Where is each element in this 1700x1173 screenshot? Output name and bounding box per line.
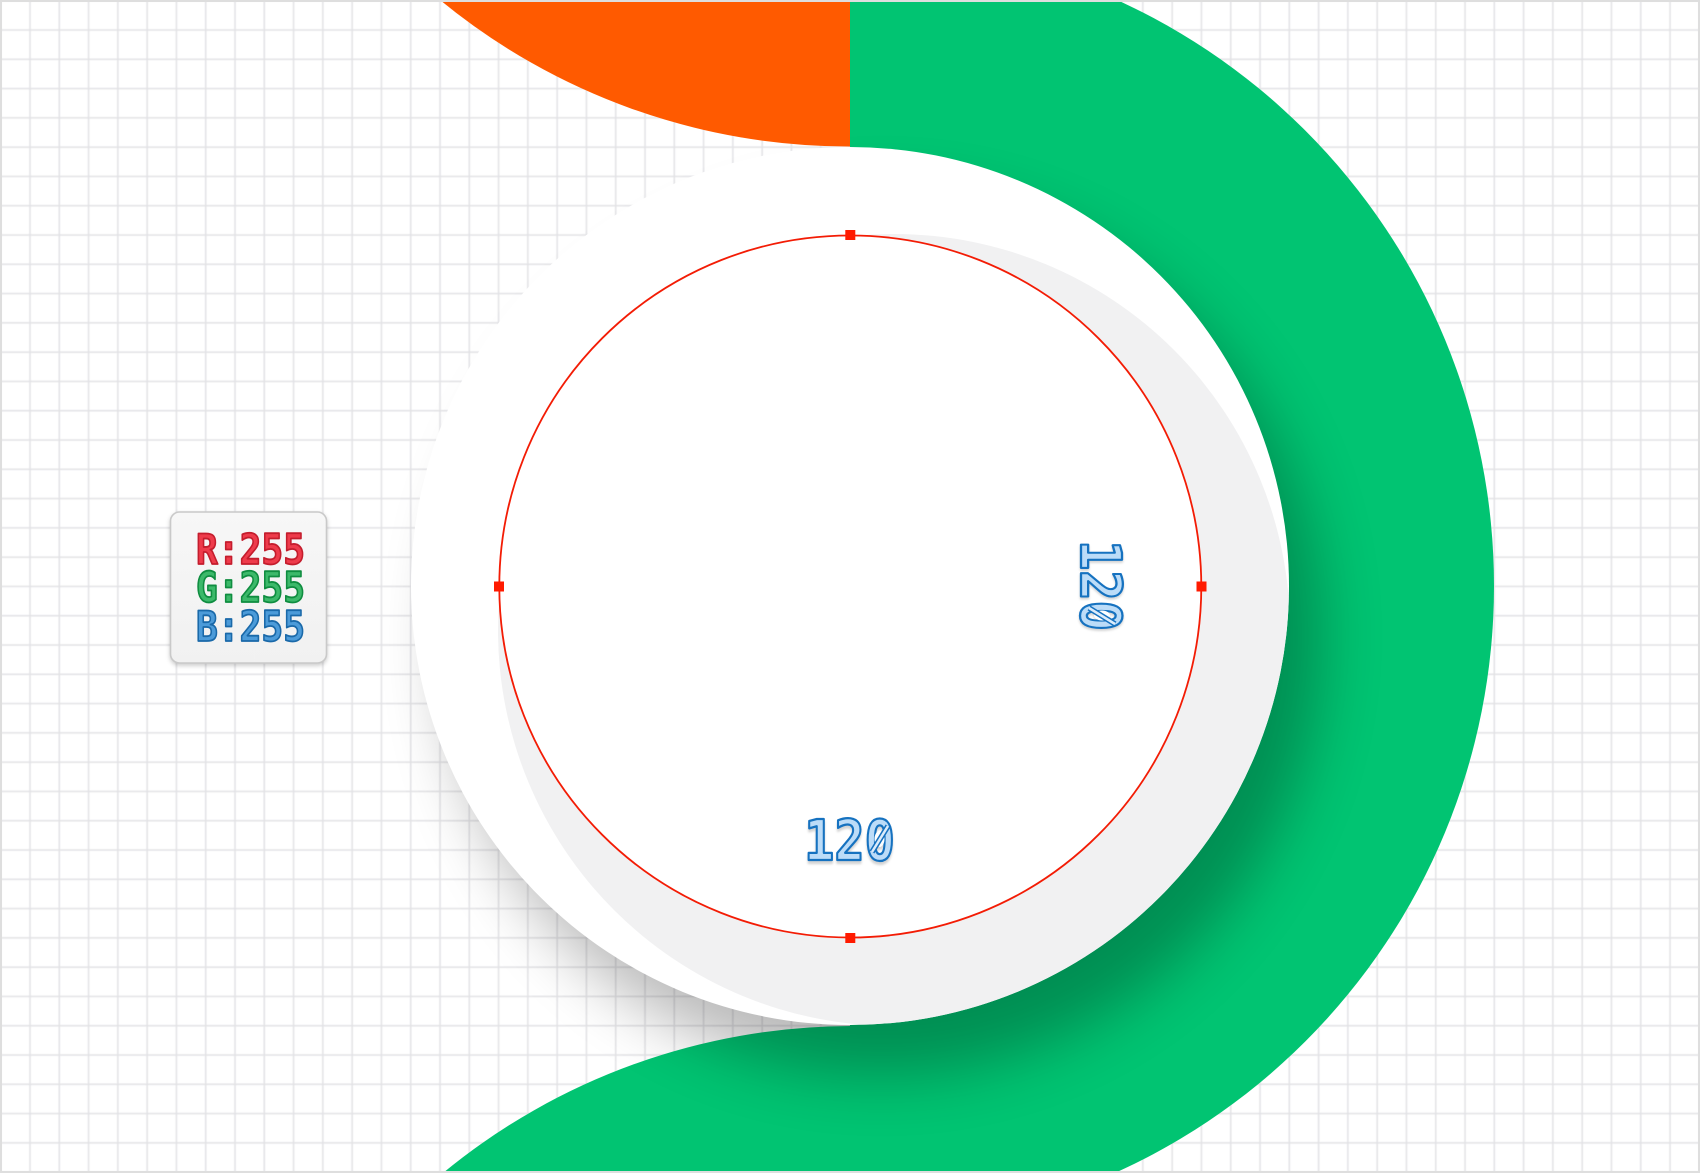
- dimension label: bottom 120: 120: [804, 809, 895, 874]
- red value: R:255: [196, 525, 305, 574]
- orange upper-left curve: [440, 0, 850, 147]
- green outer ring: [850, 0, 1494, 1173]
- inner circle with red selection path and anchor handles: [494, 230, 1206, 943]
- colour value card: [170, 512, 326, 663]
- card background: [170, 512, 326, 663]
- dimension label: right 120 rotated: 120: [1067, 540, 1132, 631]
- grey crescent: [498, 234, 1290, 1026]
- green value: G:255: [196, 563, 305, 612]
- green lower-left curve: [443, 1026, 850, 1173]
- blue value: B:255: [196, 602, 305, 651]
- shadow of white circle: [443, 197, 1321, 1075]
- white circle: [411, 147, 1289, 1025]
